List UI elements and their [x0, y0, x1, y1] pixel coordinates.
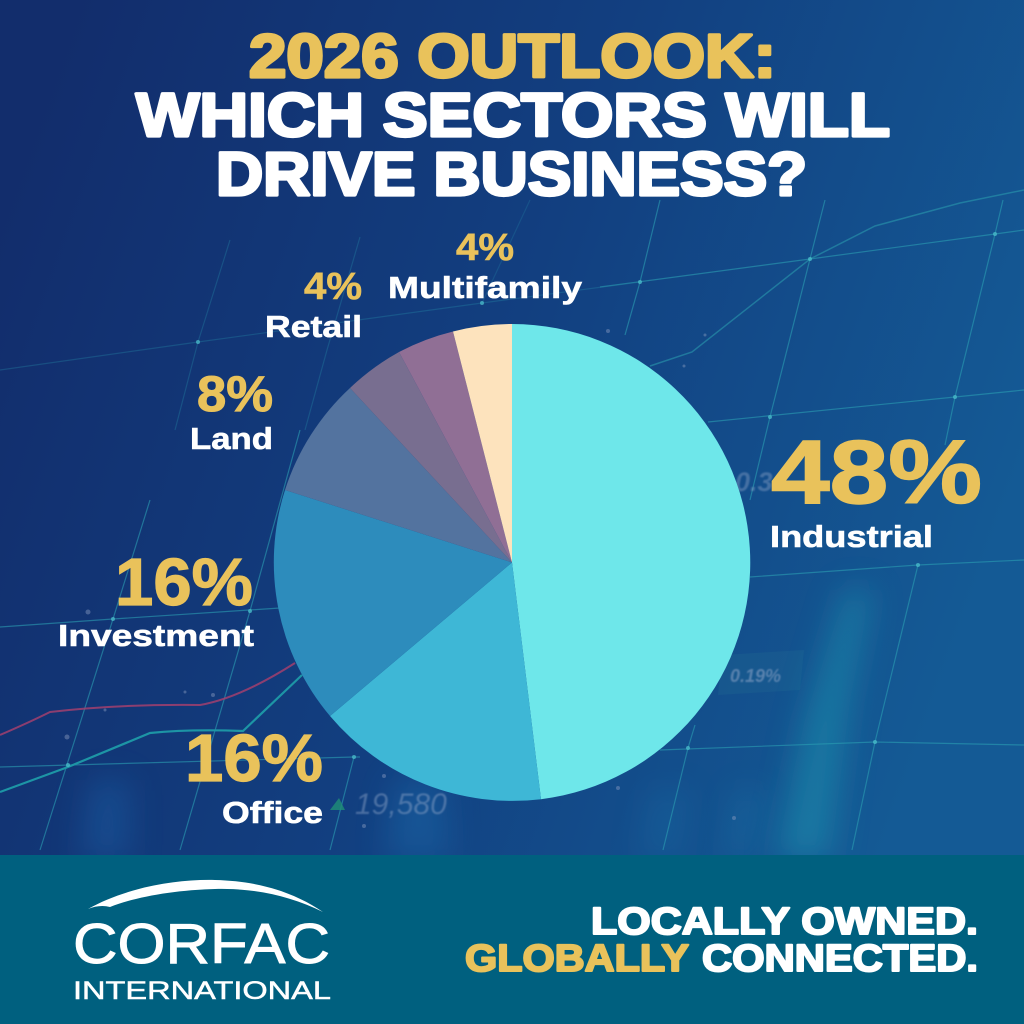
slice: Industrial 48% — [512, 324, 750, 799]
slice: Other 4% — [399, 332, 512, 562]
faint dots — [64, 329, 736, 828]
slice: Land 8% — [285, 388, 512, 562]
label: Land: 8% — [197, 366, 273, 422]
faint ticker box: 0.19% — [718, 650, 804, 695]
label: Land: Land — [190, 421, 273, 456]
label: Industrial: Industrial — [770, 519, 933, 554]
tagline word: CONNECTED.: CONNECTED. — [702, 938, 978, 980]
footer band — [0, 855, 1024, 1024]
tagline line 1: LOCALLY OWNED. — [591, 901, 978, 943]
label: Investment — [58, 545, 254, 653]
slice: Investment 16% — [274, 490, 512, 716]
faint ticker triangle — [330, 798, 345, 810]
label: Retail: 4% — [304, 266, 362, 308]
label: Office: 16% — [185, 721, 323, 796]
slice: Multifamily 4% — [453, 324, 512, 562]
faint ticker: 0.3: 0.3 — [735, 467, 773, 497]
slice: Office 16% — [330, 562, 541, 801]
label: Multifamily: 4% — [456, 227, 514, 269]
label: Land — [190, 366, 273, 456]
label: Office — [185, 721, 323, 830]
logo: CORFAC International — [73, 880, 331, 1005]
faint ticker: 19,580: 19,580 — [355, 788, 447, 821]
label: Investment: Investment — [58, 618, 254, 653]
label: Industrial: 48% — [771, 423, 982, 523]
logo wordmark: CORFAC — [73, 912, 330, 976]
label: Multifamily: Multifamily — [388, 270, 583, 305]
title line 3: DRIVE BUSINESS? — [216, 140, 807, 208]
faint ticker box: 0.19%: 0.19% — [730, 666, 781, 686]
label: Multifamily — [388, 227, 583, 305]
chart line: teal — [0, 675, 302, 792]
label: Retail — [265, 266, 362, 344]
logo swoosh — [88, 880, 323, 912]
label: Office: Office — [222, 795, 323, 830]
title — [136, 22, 890, 208]
label: Investment: 16% — [115, 545, 253, 620]
label: Industrial — [770, 423, 982, 554]
title line 1: 2026 OUTLOOK: — [249, 22, 776, 90]
pie chart — [274, 324, 750, 801]
tagline — [465, 901, 978, 980]
title line 2: WHICH SECTORS WILL — [136, 81, 890, 149]
sparkle points at grid intersections — [66, 232, 997, 767]
tagline word: GLOBALLY: GLOBALLY — [465, 938, 689, 980]
chart line: pink — [0, 663, 295, 735]
logo subtitle: INTERNATIONAL — [73, 977, 331, 1005]
label: Retail: Retail — [265, 309, 362, 344]
chart line: upper right teal — [650, 190, 1024, 366]
slice: Retail 4% — [350, 352, 512, 562]
